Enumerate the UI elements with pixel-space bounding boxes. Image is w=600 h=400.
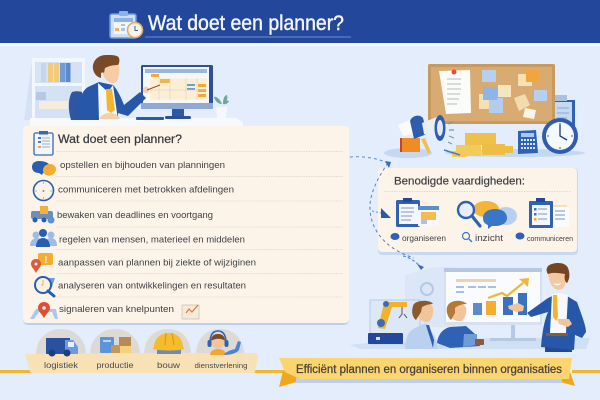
- icon: pin with alert: [31, 253, 53, 273]
- task: aanpassen: aanpassen van plannen bij ziekte of wijziginen: [58, 258, 256, 268]
- sector: logistiek: [44, 338, 79, 370]
- icon: calendar with clock: [110, 11, 142, 38]
- factory backdrop: [405, 267, 455, 327]
- presenter: [508, 263, 586, 352]
- gold boxes: [444, 133, 513, 157]
- illustration: cork board and office items: [384, 64, 585, 158]
- presentation board: [444, 268, 542, 341]
- icon: people: [30, 229, 57, 247]
- header banner: [0, 0, 600, 46]
- icon: headset agent: [208, 331, 241, 355]
- skill: organiseren: organiseren: [402, 233, 446, 243]
- task: bewaken: bewaken van deadlines en voortgang: [57, 210, 213, 220]
- illustration: planner at desk: [24, 55, 243, 126]
- task: regelen: [30, 229, 245, 247]
- bookcase: [24, 58, 85, 120]
- icon: cargo truck: [31, 206, 54, 224]
- skill: communiceren: [516, 198, 573, 243]
- icon: speech bubbles: [32, 161, 56, 176]
- robot arm: [368, 301, 407, 344]
- icon: magnifier with speech bubbles: [458, 201, 517, 229]
- sector: productie: productie: [96, 361, 134, 370]
- colleague left: [405, 301, 449, 349]
- icon: boxes: [100, 337, 131, 353]
- domes: [36, 329, 86, 355]
- title: Wat doet een planner?: [148, 11, 344, 35]
- panel heading: Wat doet een planner?: [58, 134, 182, 146]
- icon: truck: [46, 338, 78, 356]
- icon: clipboard with calendar: [396, 198, 439, 227]
- icon: pin with alert: !: [44, 255, 48, 265]
- skill: organiseren: [390, 198, 446, 243]
- sector: logistiek: logistiek: [44, 361, 79, 370]
- sector: productie: [96, 337, 134, 370]
- sector strip: [0, 329, 286, 373]
- task: communiceren: communiceren met betrokken afdelingen: [58, 184, 234, 194]
- task: opstellen: opstellen en bijhouden van planningen: [60, 160, 225, 170]
- task: signaleren: [30, 302, 199, 319]
- icon: clock: [34, 180, 54, 200]
- clipboard behind clock: [555, 95, 575, 130]
- monitor: [141, 65, 213, 119]
- task: signaleren: signaleren van knelpunten: [59, 304, 174, 314]
- task: regelen: regelen van mensen, materieel en middelen: [59, 234, 245, 244]
- skills heading: Benodigde vaardigheden:: [394, 176, 525, 188]
- sector: dienstverlening: [194, 331, 248, 370]
- skill: communiceren: communiceren: [527, 234, 573, 243]
- dashed connector arrows: [350, 157, 414, 258]
- skill: inzicht: inzicht: [475, 233, 504, 243]
- task: analyseren: [35, 277, 246, 296]
- task: aanpassen: [31, 253, 256, 273]
- task: bewaken: [31, 206, 213, 224]
- icon: location pin on map: [30, 302, 58, 319]
- dashed arrow to presentation: [403, 256, 424, 270]
- panel: tasks: [23, 126, 349, 325]
- sector: bouw: bouw: [157, 361, 180, 370]
- bottom ribbon slogan: [279, 358, 600, 387]
- task: analyseren: analyseren van ontwikkelingen en resultaten: [58, 280, 246, 290]
- calculator: [518, 130, 538, 154]
- band: [25, 353, 258, 373]
- task: opstellen: [32, 160, 225, 176]
- sector: dienstverlening: dienstverlening: [194, 361, 248, 370]
- panel: required skills: [378, 168, 578, 255]
- icon: clipboard: [34, 131, 53, 155]
- illustration: team presentation: [350, 263, 590, 352]
- icon: chart card: [182, 305, 199, 319]
- task: communiceren: [34, 180, 234, 200]
- clock: [542, 118, 578, 154]
- icon: clipboard with notes: [529, 198, 569, 228]
- plant: [214, 95, 229, 119]
- sector: bouw: [153, 333, 184, 370]
- desk: [30, 118, 243, 126]
- megaphone: [398, 115, 454, 154]
- icon: magnifier: [35, 277, 55, 296]
- skill: inzicht: [458, 201, 517, 243]
- icon: hard hat: [153, 333, 184, 354]
- colleague right: [437, 301, 484, 348]
- person: [69, 55, 160, 120]
- cork board: [428, 64, 555, 124]
- bottom ribbon slogan: Efficiënt plannen en organiseren binnen organisaties: [296, 364, 562, 376]
